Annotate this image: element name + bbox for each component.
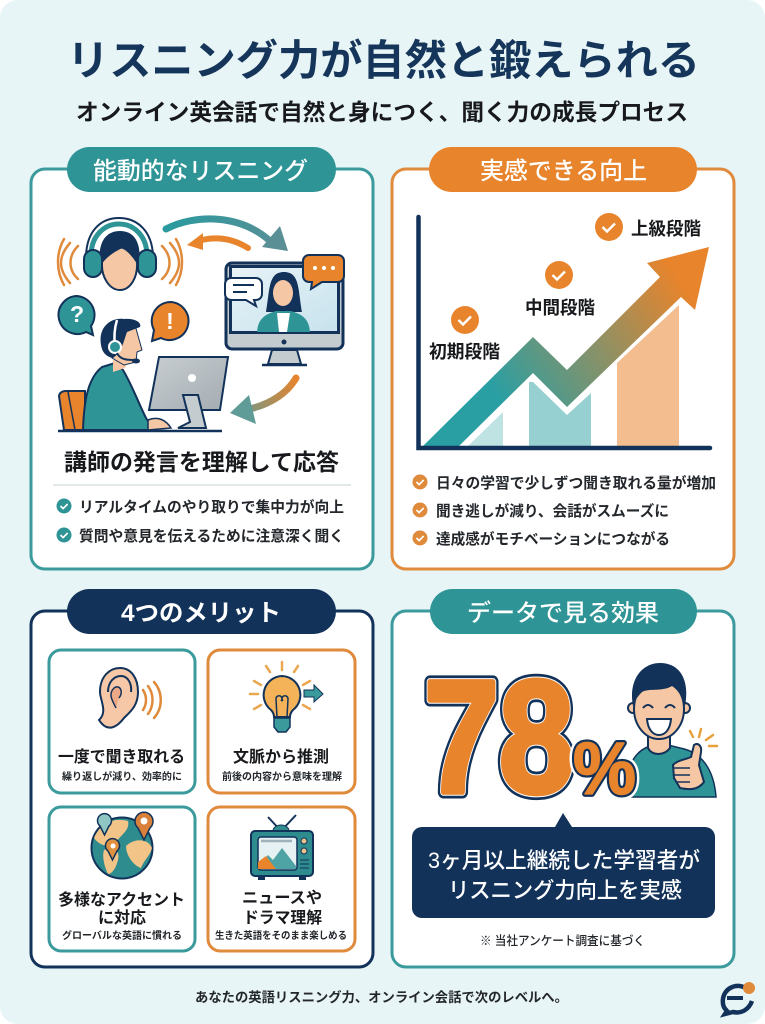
statistic: 78 percent: % [573, 727, 636, 810]
icon: exclamation bubble: ! [166, 308, 174, 334]
card: news and drama: ニュースや [242, 889, 322, 907]
icon: teacher on monitor [226, 263, 343, 365]
callout: learners: 3ヶ月以上継続した学習者が [428, 848, 700, 873]
statistic: 78 percent: 78 [424, 647, 574, 826]
card: catch at once: 繰り返しが減り、効率的に [62, 770, 182, 783]
card: catch at once: 一度で聞き取れる [58, 747, 185, 766]
icon: logo [723, 982, 755, 1014]
panel: noticeable improvement [392, 147, 734, 569]
statistic: 78 percent: % [573, 727, 636, 810]
statistic: 78 percent: % [573, 727, 636, 810]
card: news and drama [208, 807, 355, 951]
panel: active listening [31, 147, 373, 569]
icon: television [251, 815, 313, 880]
icon: white speech bubble [225, 278, 262, 306]
list item: motivation: 達成感がモチベーションにつながる [436, 530, 670, 548]
icon: globe [92, 812, 153, 878]
icon: learner at desk [59, 319, 171, 430]
icon: desk computer [58, 357, 228, 431]
heading pill: data: データで見る効果 [467, 599, 659, 627]
icon: question bubble: ? [70, 301, 84, 327]
card: various accents [49, 807, 195, 951]
heading pill: active listening: 能動的なリスニング [93, 158, 308, 185]
stage: beginner [429, 306, 500, 362]
arrow: orange to teal [230, 378, 296, 424]
icon: listener with headphones [58, 218, 182, 290]
heading pill: improvement: 実感できる向上 [480, 157, 647, 185]
list item: daily: 日々の学習で少しずつ聞き取れる量が増加 [436, 474, 716, 492]
stage: advanced [595, 213, 701, 241]
arrow: orange back to listener [187, 233, 248, 250]
heading: understanding: 講師の発言を理解して応答 [64, 449, 339, 475]
note: survey: ※ 当社アンケート調査に基づく [480, 933, 645, 948]
list item: smooth: 聞き逃しが減り、会話がスムーズに [436, 502, 669, 520]
title: リスニング力が自然と鍛えられる [67, 37, 700, 84]
heading pill: merits [67, 589, 336, 634]
heading pill: active listening [67, 147, 336, 192]
heading pill: improvement [429, 147, 697, 192]
card: infer from context: 文脈から推測 [233, 748, 329, 766]
statistic: 78 percent: 78 [424, 647, 574, 826]
card: various accents: グローバルな英語に慣れる [62, 929, 182, 942]
card: news and drama: ドラマ理解 [243, 909, 322, 927]
card: various accents: 多様なアクセント [58, 890, 185, 909]
panel: four merits [31, 589, 373, 967]
subtitle: オンライン英会話で自然と身につく、聞く力の成長プロセス [76, 99, 688, 125]
list item: realtime: リアルタイムのやり取りで集中力が向上 [79, 498, 344, 516]
callout: learners: リスニング力向上を実感 [448, 878, 682, 903]
stage: beginner: 初期段階 [429, 342, 500, 362]
icon: smiling person [625, 663, 717, 797]
icon: question bubble [59, 296, 95, 335]
arrow: teal to monitor [166, 219, 288, 251]
stage: advanced: 上級段階 [631, 219, 701, 239]
icon: ear [99, 668, 161, 728]
icon: orange speech bubble [303, 255, 344, 289]
card: catch at once [49, 650, 195, 793]
icon: light bulb [250, 662, 323, 732]
stage: intermediate [525, 261, 595, 318]
heading pill: merits: 4つのメリット [121, 600, 281, 627]
heading pill: data [430, 589, 697, 634]
card: infer from context: 前後の内容から意味を理解 [222, 770, 342, 783]
card: various accents: に対応 [98, 909, 146, 927]
card: news and drama: 生きた英語をそのまま楽しめる [215, 929, 347, 942]
statistic: 78 percent: 78 [424, 647, 574, 826]
callout: learners [412, 813, 715, 918]
footer text: あなたの英語リスニング力、オンライン会話で次のレベルへ。 [195, 989, 568, 1005]
chart: growth [418, 213, 710, 448]
panel: data effect [392, 589, 734, 967]
stage: intermediate: 中間段階 [525, 298, 595, 318]
card: infer from context [208, 650, 355, 793]
icon: exclamation bubble [152, 302, 188, 341]
list item: questions: 質問や意見を伝えるために注意深く聞く [79, 527, 344, 545]
